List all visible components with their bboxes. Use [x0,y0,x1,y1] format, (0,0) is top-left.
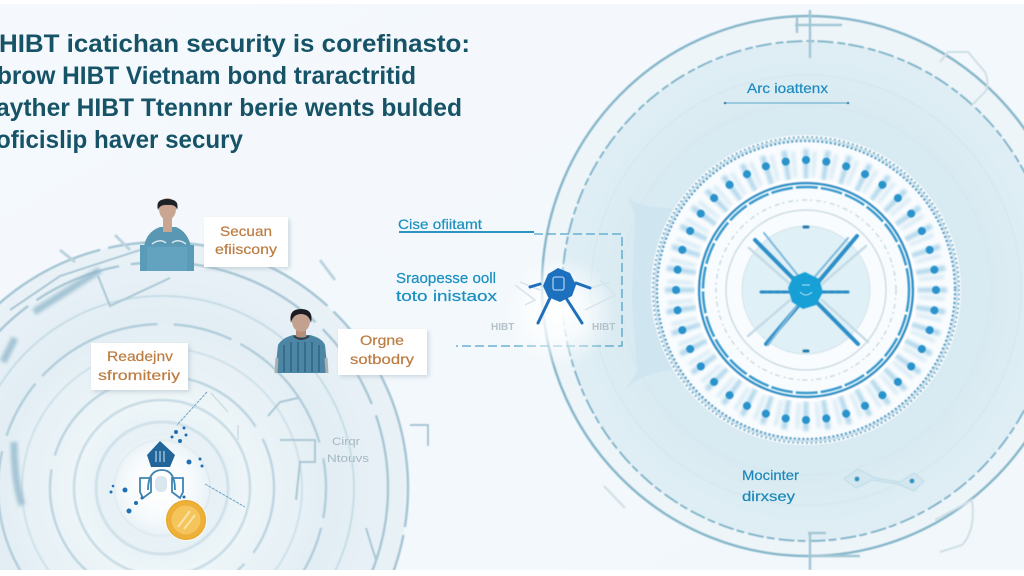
dark left band [3,270,100,505]
label: middle callout [396,271,498,305]
left circular diagram [0,235,428,576]
inner disks [706,190,906,390]
person with patterned shirt [275,309,328,373]
X spokes [748,227,868,351]
label: middle callout: Sraopesse ooll [396,271,496,287]
medallion [651,135,961,445]
label: bottom of right circle: dirxsey [742,488,795,504]
label: bottom of right circle [742,467,799,504]
right medallion side tab [626,198,672,388]
title: brow HIBT Vietnam bond traractritid [0,62,416,90]
label: top of right circle: Arc ioattenx [747,80,828,96]
card: right: Orgne [360,332,404,348]
icon: central drone [491,256,616,368]
card: right: sotbodry [350,351,414,367]
title: ayther HIBT Ttennnr berie wents bulded [0,94,462,122]
callout: connector frame [399,232,622,346]
icon: gold coin [165,499,207,541]
card: left [91,343,188,390]
title: oficislip haver secury [0,126,243,154]
label: top callout: Cise ofiitamt [398,216,482,232]
label: middle callout: toto inistaox [396,289,498,305]
right circular diagram [542,10,1024,570]
radial blue marks [680,164,932,416]
faint label in left circle [327,436,370,465]
icon: central drone: HIBT [592,322,615,333]
beaded outer rim [653,137,959,443]
card: left: sfromiteriy [98,367,180,383]
card: top: efiiscony [215,241,277,257]
card: top [204,217,288,267]
icon: small nodes [844,469,924,491]
label: top of right circle [724,80,849,104]
faint label in left circle: Cirqr [332,436,360,448]
person with podium [140,198,194,271]
card: left: Readejnv [107,348,173,364]
blue ring [697,181,915,399]
hub [788,272,823,309]
title [0,30,470,154]
card: top: Secuan [220,223,272,239]
icon: central drone: HIBT [491,322,514,333]
top and bottom connectors [795,10,860,570]
icon: left circle hub and coin [110,392,245,541]
card: right [338,329,427,375]
faint label in left circle: Ntouvs [327,453,370,465]
title: HIBT icatichan security is corefinasto: [0,30,470,58]
label: bottom of right circle: Mocinter [742,467,799,483]
